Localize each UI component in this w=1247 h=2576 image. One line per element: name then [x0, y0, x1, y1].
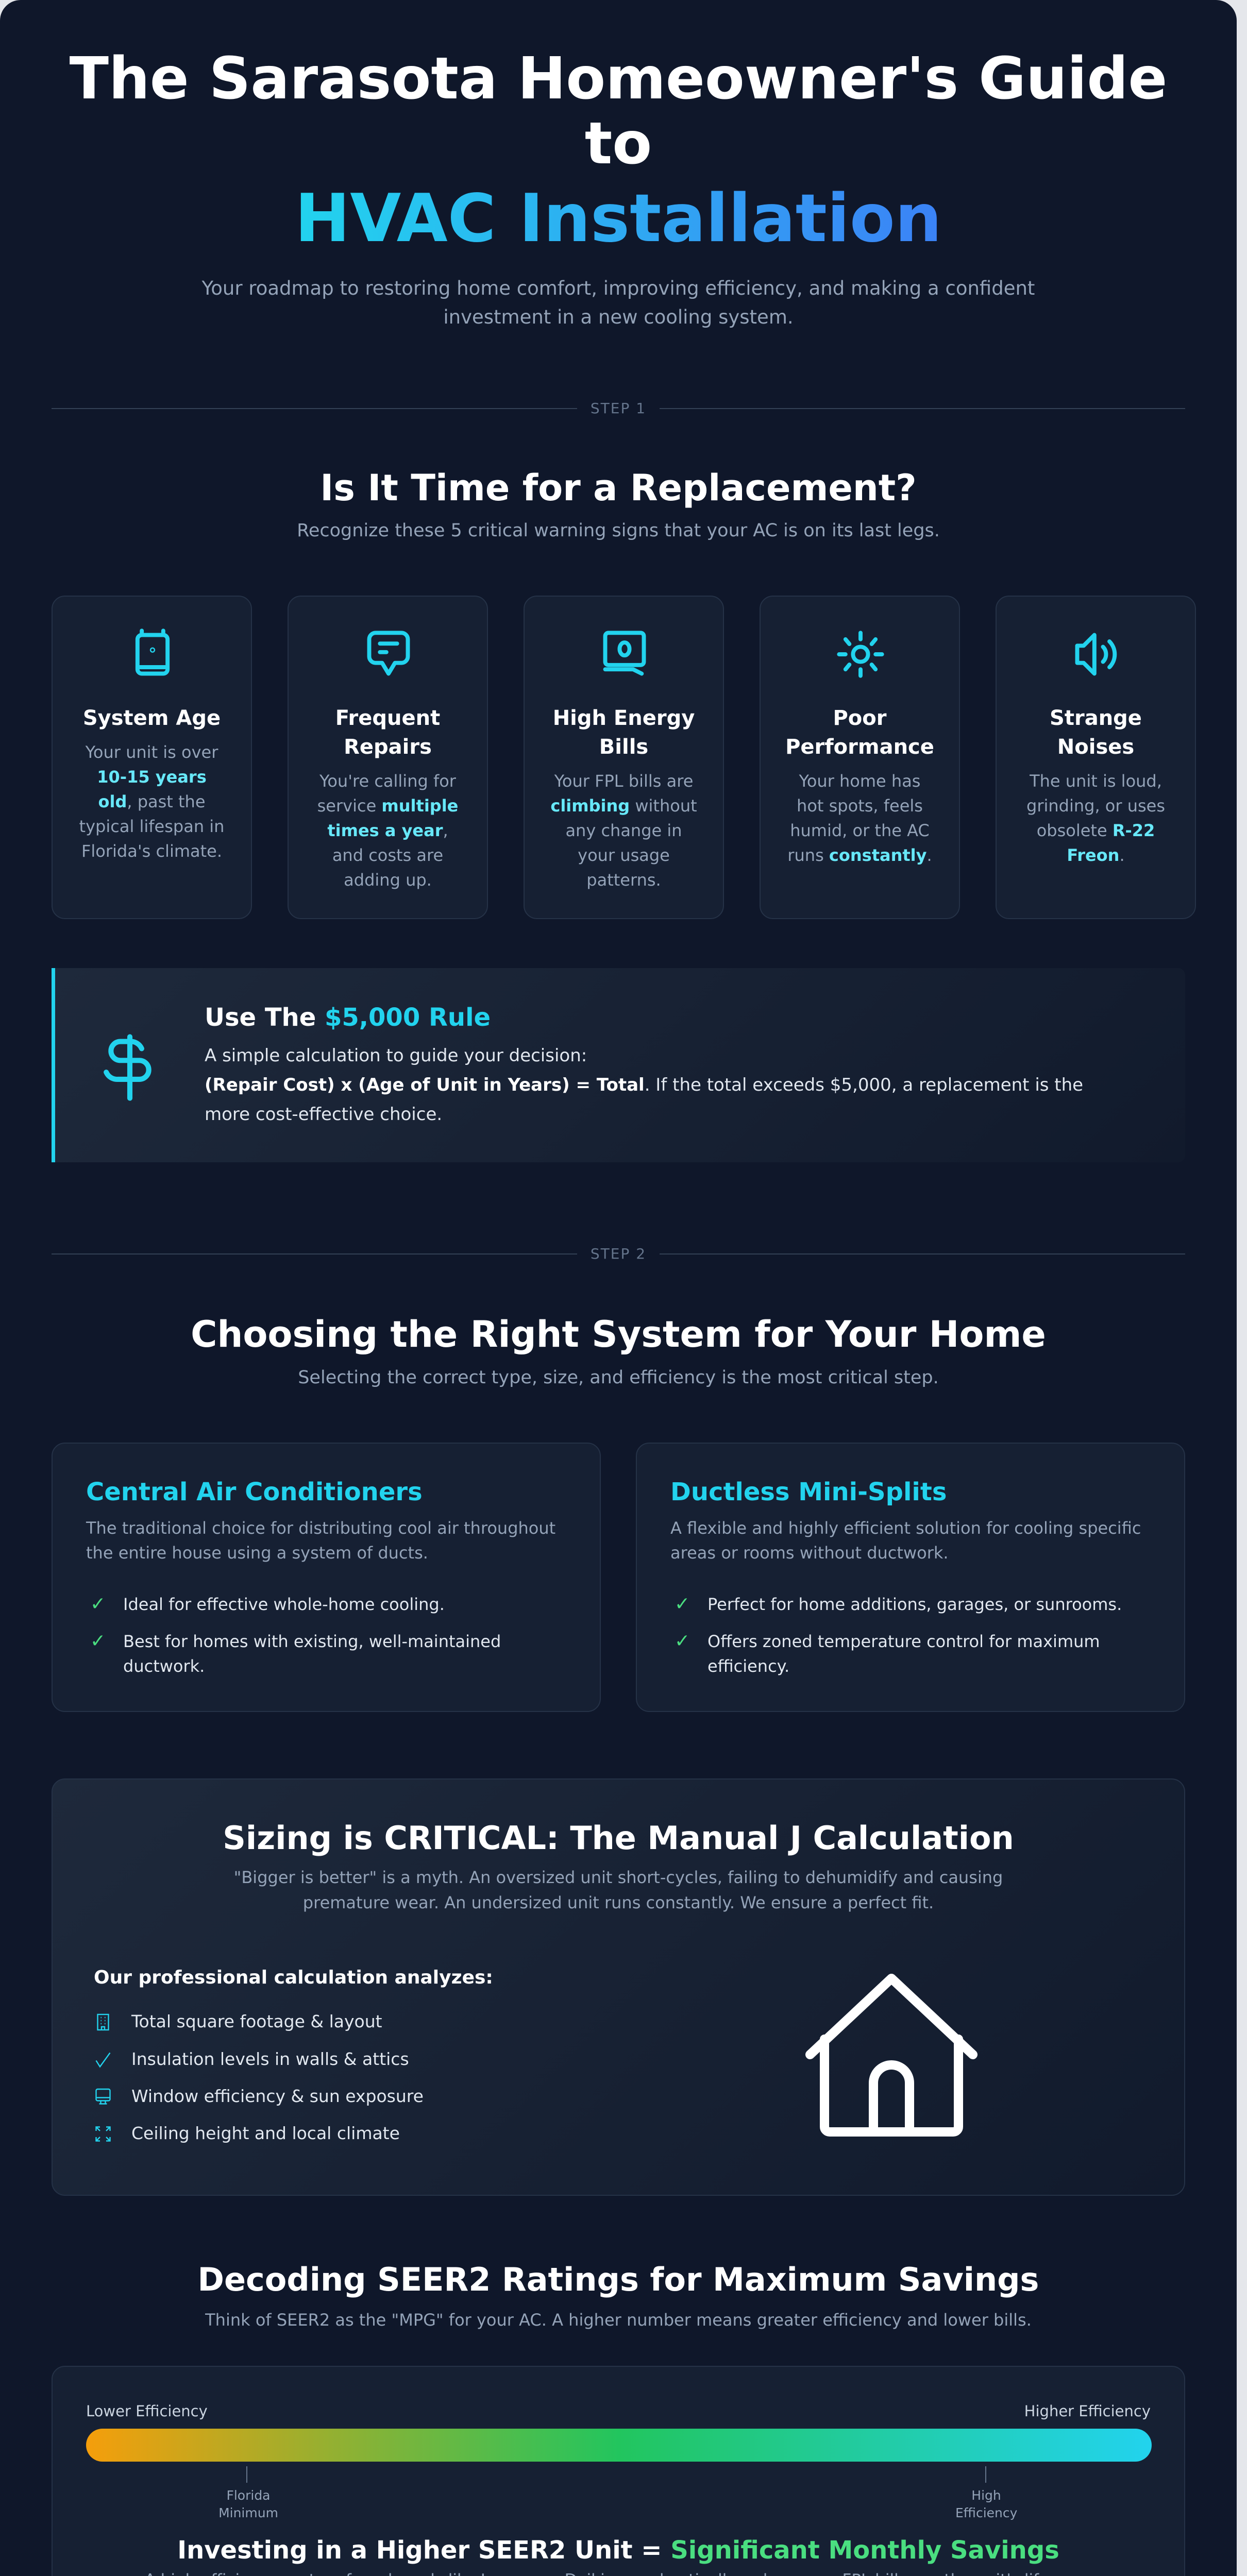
gradient bar	[86, 2429, 1152, 2462]
card: energy bills: High Energy	[553, 706, 695, 730]
savings statement: Investing in a Higher SEER2 Unit = Significant Monthly Savings	[177, 2536, 1059, 2565]
panel: mini-splits: ✓	[675, 1631, 690, 1652]
panel: mini-splits: A flexible and highly efficient solution for cooling specific areas or rooms without ductwork.	[670, 1518, 1141, 1563]
panel: mini-splits: Perfect for home additions, garages, or sunrooms.	[707, 1595, 1122, 1614]
panel: central air: The traditional choice for distributing cool air throughout the entire house using a system of ducts.	[86, 1518, 555, 1563]
card: energy bills: Bills	[599, 735, 648, 759]
card: energy bills: Your FPL bills are climbing without any change in your usage patterns.	[550, 771, 697, 890]
manual J text: premature wear. An undersized unit runs constantly. We ensure a perfect fit.	[303, 1893, 934, 1912]
icon: dollar	[104, 1034, 151, 1101]
icon: speaker	[1075, 633, 1117, 676]
panel: mini-splits: Ductless Mini-Splits	[670, 1478, 947, 1506]
card: frequent repairs	[288, 596, 488, 919]
marker: florida minimum: Florida	[226, 2488, 271, 2503]
card: energy bills	[524, 596, 724, 919]
marker: florida minimum: Minimum	[218, 2505, 278, 2520]
card: poor performance: Your home has hot spots, feels humid, or the AC runs constantly.	[787, 771, 932, 865]
callout text: A simple calculation to guide your decision:	[205, 1045, 587, 1066]
panel: manual J	[52, 1778, 1185, 2196]
title	[70, 45, 1167, 177]
panel: mini-splits	[636, 1443, 1185, 1712]
list: factors	[95, 2011, 424, 2143]
callout text	[205, 1045, 1083, 1125]
icon: sun	[837, 631, 884, 678]
analyzes heading: Our professional calculation analyzes:	[94, 1967, 493, 1988]
card: system age: Your unit is over 10-15 years old, past the typical lifespan in Florida's climate.	[79, 742, 224, 861]
step 1 divider: STEP 1	[591, 400, 646, 417]
icon: money	[603, 631, 646, 676]
heading: replacement: Is It Time for a Replacement?	[320, 467, 917, 509]
card: strange noises	[996, 596, 1196, 919]
manual J title: Sizing is CRITICAL: The Manual J Calculation	[223, 1819, 1014, 1857]
heading: SEER2: Decoding SEER2 Ratings for Maximum Savings	[198, 2261, 1039, 2298]
item: ceiling: Ceiling height and local climate	[131, 2123, 400, 2143]
card: strange noises: The unit is loud, grinding, or uses obsolete R-22 Freon.	[1026, 771, 1165, 865]
icon: unit	[135, 629, 170, 676]
step 2 divider: STEP 2	[591, 1245, 646, 1262]
title highlight: HVAC Installation: HVAC Installation	[295, 180, 942, 257]
item: square footage: Total square footage & layout	[131, 2011, 382, 2031]
marker: high efficiency	[955, 2466, 1017, 2523]
manual J text	[234, 1868, 1003, 1912]
label: lower: Lower Efficiency	[86, 2402, 208, 2420]
card: frequent repairs: Repairs	[344, 735, 432, 759]
item: insulation: Insulation levels in walls & attics	[131, 2049, 409, 2069]
panel: central air: ✓	[90, 1594, 106, 1615]
callout title: Use The $5,000 Rule	[205, 1003, 491, 1032]
heading: choosing: Choosing the Right System for Your Home	[191, 1313, 1046, 1355]
icon: house	[804, 1972, 979, 2137]
card: system age: System Age	[83, 706, 221, 730]
panel: SEER2 chart	[52, 2366, 1185, 2576]
manual J text: "Bigger is better" is a myth. An oversized unit short-cycles, failing to dehumidify and causing	[234, 1868, 1003, 1887]
card: poor performance	[760, 596, 960, 919]
card: system age	[52, 596, 252, 919]
card: frequent repairs: Frequent	[335, 706, 440, 730]
panel: mini-splits: ✓	[675, 1594, 690, 1615]
card: poor performance: Poor	[833, 706, 886, 730]
marker: high efficiency: Efficiency	[955, 2505, 1017, 2520]
label: higher: Higher Efficiency	[1024, 2402, 1151, 2420]
panel: central air: Best for homes with existing, well-maintained ductwork.	[123, 1632, 501, 1676]
card: frequent repairs: You're calling for service multiple times a year, and costs are adding up.	[317, 771, 458, 890]
card: strange noises: Noises	[1057, 735, 1134, 759]
marker: florida minimum	[217, 2466, 279, 2523]
panel: central air: ✓	[90, 1631, 106, 1652]
callout: $5,000 rule	[52, 968, 1185, 1162]
subtitle	[202, 277, 1035, 328]
item: windows: Window efficiency & sun exposure	[131, 2086, 424, 2106]
icon: message	[367, 631, 410, 676]
subheading: Recognize these 5 critical warning signs that your AC is on its last legs.	[297, 520, 940, 541]
callout text: (Repair Cost) x (Age of Unit in Years) = Total. If the total exceeds $5,000, a replacement is the more cost-effective choice.	[205, 1075, 1083, 1125]
subheading: Selecting the correct type, size, and efficiency is the most critical step.	[298, 1367, 939, 1388]
title: to	[585, 110, 652, 177]
subtitle: investment in a new cooling system.	[443, 306, 794, 328]
card: poor performance: Performance	[785, 735, 934, 759]
card: strange noises: Strange	[1050, 706, 1142, 730]
panel: central air	[52, 1443, 601, 1712]
marker: high efficiency: High	[971, 2488, 1001, 2503]
panel: central air: Ideal for effective whole-home cooling.	[123, 1595, 445, 1614]
panel: central air: Central Air Conditioners	[86, 1478, 423, 1506]
SEER2 subtitle: Think of SEER2 as the "MPG" for your AC. A higher number means greater efficiency and lower bills.	[205, 2310, 1032, 2330]
panel: mini-splits: Offers zoned temperature control for maximum efficiency.	[707, 1632, 1100, 1676]
subtitle: Your roadmap to restoring home comfort, improving efficiency, and making a confident	[202, 277, 1035, 299]
title: The Sarasota Homeowner's Guide	[70, 45, 1167, 112]
